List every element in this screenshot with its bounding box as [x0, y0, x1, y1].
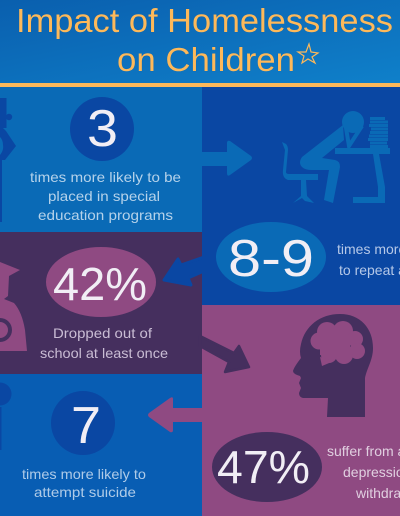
stat ellipse: 8-9 — [216, 222, 326, 292]
panel: depression — [202, 305, 400, 516]
icon: partial person — [0, 382, 12, 450]
text: special education — [30, 169, 181, 223]
panel: dropped out — [0, 232, 202, 374]
text: depression — [327, 443, 400, 501]
stat circle: 7: 7 — [71, 397, 101, 455]
stat circle: 7 — [51, 391, 115, 455]
text: special education: times more likely to be — [30, 169, 181, 185]
stat ellipse: 47%: 47% — [217, 441, 310, 493]
icon: partial figure — [0, 98, 16, 222]
arrow: left to 7 — [148, 397, 204, 432]
panel: suicide — [0, 374, 202, 516]
text: special education: placed in special — [48, 188, 160, 204]
arrow: down-right to brain — [200, 336, 249, 372]
title: on Children — [117, 41, 295, 78]
icon: student slumped at desk — [282, 111, 390, 203]
text: repeat a grade — [337, 241, 400, 278]
stat ellipse: 42%: 42% — [53, 258, 147, 310]
arrow: right — [200, 141, 252, 176]
gold divider — [0, 83, 400, 87]
text: suicide — [22, 466, 146, 500]
panel: repeat a grade — [200, 87, 400, 305]
arrow: down-left to 42% — [164, 257, 204, 285]
title — [16, 2, 393, 78]
stat ellipse: 8-9: 8-9 — [228, 230, 314, 288]
icon: star — [298, 44, 318, 63]
text: suicide: times more likely to — [22, 466, 146, 482]
icon: head with thought cloud — [293, 314, 373, 417]
text: dropped out: Dropped out of — [53, 325, 152, 341]
text: special education: education programs — [38, 207, 173, 223]
text: dropped out — [40, 325, 168, 361]
stat circle: 3 — [70, 97, 134, 161]
text: dropped out: school at least once — [40, 345, 168, 361]
stat ellipse: 47% — [212, 432, 322, 502]
title: Impact of Homelessness — [16, 2, 393, 39]
panel: special education — [0, 87, 202, 232]
header band — [0, 0, 400, 83]
stat circle: 3: 3 — [87, 100, 118, 158]
icon: graduate — [0, 262, 27, 351]
text: suicide: attempt suicide — [34, 484, 136, 500]
stat ellipse: 42% — [46, 247, 156, 317]
